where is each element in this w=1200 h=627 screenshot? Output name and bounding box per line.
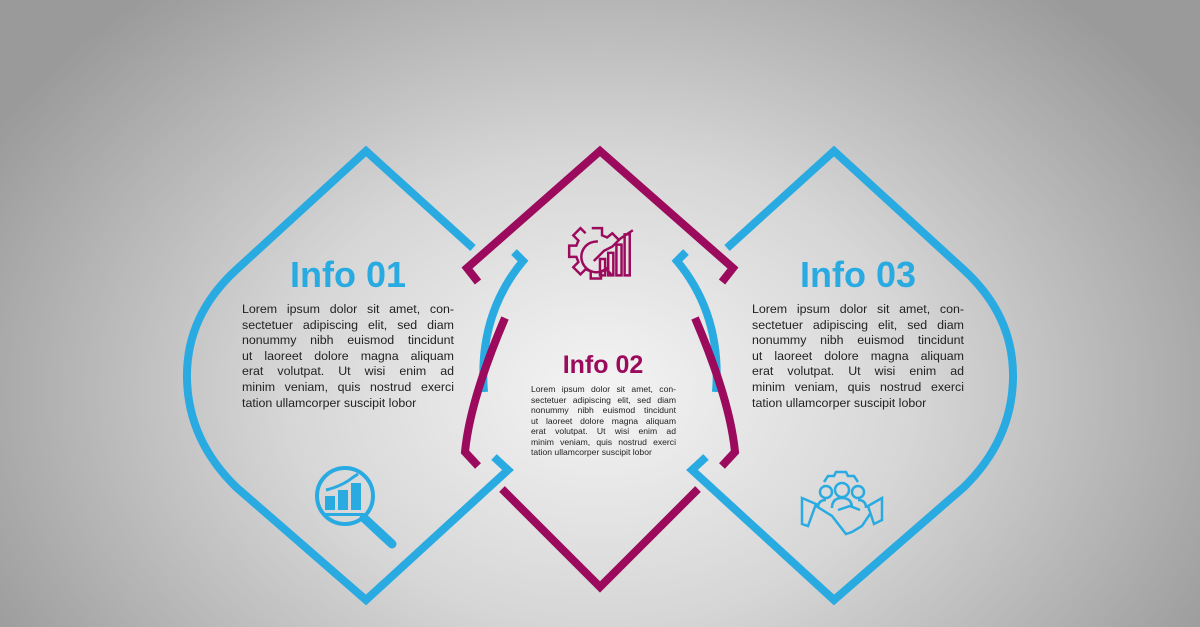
text block: info 01: sectetuer adipiscing elit, sed diam — [242, 318, 454, 332]
panel outline: info 01 — [187, 151, 508, 600]
text block: info 01: nonummy nibh euismod tincidunt — [242, 333, 454, 347]
text block: info 03 — [752, 302, 964, 410]
text block: info 02: Lorem ipsum dolor sit amet, con- — [531, 384, 676, 394]
inner magenta arcs — [465, 318, 735, 466]
title: Info 02: Info 02 — [563, 351, 643, 379]
text block: info 03: nonummy nibh euismod tincidunt — [752, 333, 964, 347]
text block: info 03: erat volutpat. Ut wisi enim ad — [752, 364, 964, 378]
text block: info 03: minim veniam, quis nostrud exerci — [752, 380, 964, 394]
text block: info 03: tation ullamcorper suscipit lobor — [752, 396, 926, 410]
text block: info 01: ut laoreet dolore magna aliquam — [242, 349, 454, 363]
text block: info 01 — [242, 302, 454, 410]
inner blue arcs — [483, 252, 717, 392]
text block: info 01: tation ullamcorper suscipit lobor — [242, 396, 416, 410]
panel outline: info 02 top — [467, 151, 733, 282]
text block: info 02: minim veniam, quis nostrud exerci — [531, 436, 676, 446]
text block: info 02: sectetuer adipiscing elit, sed diam — [531, 394, 676, 404]
title: Info 01: Info 01 — [290, 254, 406, 295]
text block: info 01: Lorem ipsum dolor sit amet, con- — [242, 302, 454, 316]
text block: info 02: ut laoreet dolore magna aliquam — [531, 416, 676, 426]
text block: info 03: ut laoreet dolore magna aliquam — [752, 349, 964, 363]
text block: info 02: erat volutpat. Ut wisi enim ad — [531, 426, 676, 436]
panel outline: info 02 bottom — [502, 489, 698, 587]
text block: info 03: Lorem ipsum dolor sit amet, con- — [752, 302, 964, 316]
text block: info 02: tation ullamcorper suscipit lobor — [531, 447, 652, 457]
icon: gear with bar chart — [568, 226, 634, 280]
text block: info 02: nonummy nibh euismod tincidunt — [531, 405, 676, 415]
panel outline: info 03 — [692, 151, 1013, 600]
text block: info 01: erat volutpat. Ut wisi enim ad — [242, 364, 454, 378]
icon: team handshake gear — [800, 470, 884, 536]
icon: magnifier with chart — [315, 466, 396, 548]
title: Info 03: Info 03 — [800, 254, 916, 295]
text block: info 02 — [531, 384, 676, 457]
text block: info 03: sectetuer adipiscing elit, sed diam — [752, 318, 964, 332]
text block: info 01: minim veniam, quis nostrud exerci — [242, 380, 454, 394]
